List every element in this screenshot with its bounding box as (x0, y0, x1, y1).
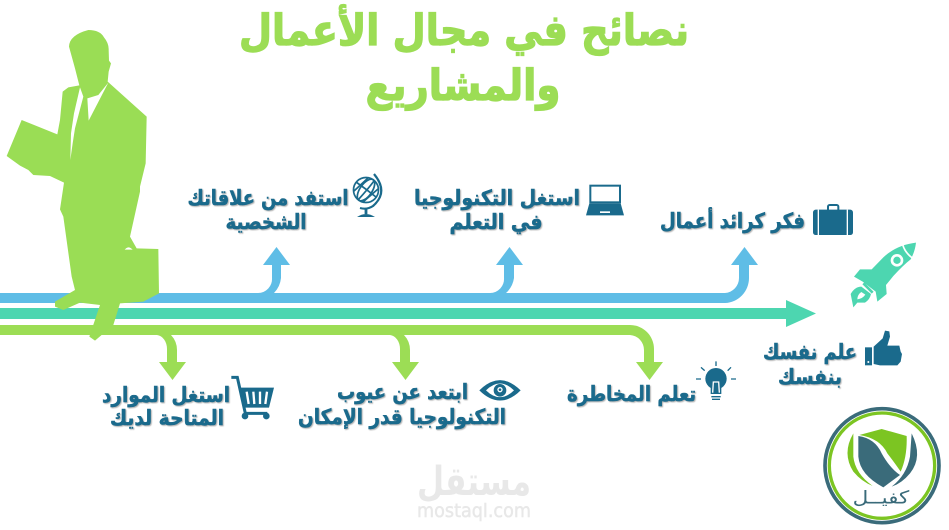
title: نصائح في مجال الأعمال (239, 4, 689, 56)
item: avoid technology flaws: التكنولوجيا قدر الإمكان (298, 405, 506, 429)
item: personal relationships: استفد من علاقاتك (188, 186, 348, 210)
item: use technology (414, 186, 580, 234)
teal main arrow (0, 300, 816, 327)
item: teach yourself: بنفسك (778, 365, 842, 389)
logo: kafeel badge (825, 409, 939, 523)
icon: shopping cart (231, 377, 274, 419)
item: use available resources: استغل الموارد (102, 383, 230, 407)
item: think like an entrepreneur: فكر كرائد أعمال (660, 206, 805, 233)
shirt and collar (70, 83, 133, 250)
item: avoid technology flaws (298, 380, 506, 429)
green timeline with down arrows (0, 325, 663, 380)
icon: globe (354, 174, 381, 217)
icon: thumbs up (865, 331, 902, 365)
icon: eye (479, 380, 521, 400)
title (239, 4, 689, 111)
watermark: mostaql: مستقل (417, 459, 531, 505)
logo wordmark: كفيــل (853, 487, 910, 508)
icon: light bulb (696, 361, 736, 399)
item: use available resources (102, 383, 230, 430)
businessman silhouette (7, 30, 159, 341)
watermark: mostaql (417, 459, 531, 522)
watermark: mostaql: mostaql.com (417, 500, 531, 522)
item: use available resources: المتاحة لديك (110, 406, 224, 430)
title: والمشاريع (366, 61, 560, 111)
icon: rocket (851, 243, 916, 307)
icon: laptop (586, 186, 624, 215)
item: use technology: في التعلم (450, 210, 542, 234)
item: learn risk-taking: تعلم المخاطرة (567, 382, 696, 406)
item: teach yourself (763, 340, 857, 389)
item: personal relationships: الشخصية (226, 210, 306, 234)
item: personal relationships (188, 186, 348, 234)
item: use technology: استغل التكنولوجيا (414, 186, 580, 210)
blue timeline with up arrows (0, 247, 758, 303)
logo shield (847, 429, 917, 487)
icon: briefcase (813, 205, 853, 235)
item: avoid technology flaws: ابتعد عن عيوب (337, 380, 468, 404)
item: teach yourself: علم نفسك (763, 340, 857, 364)
